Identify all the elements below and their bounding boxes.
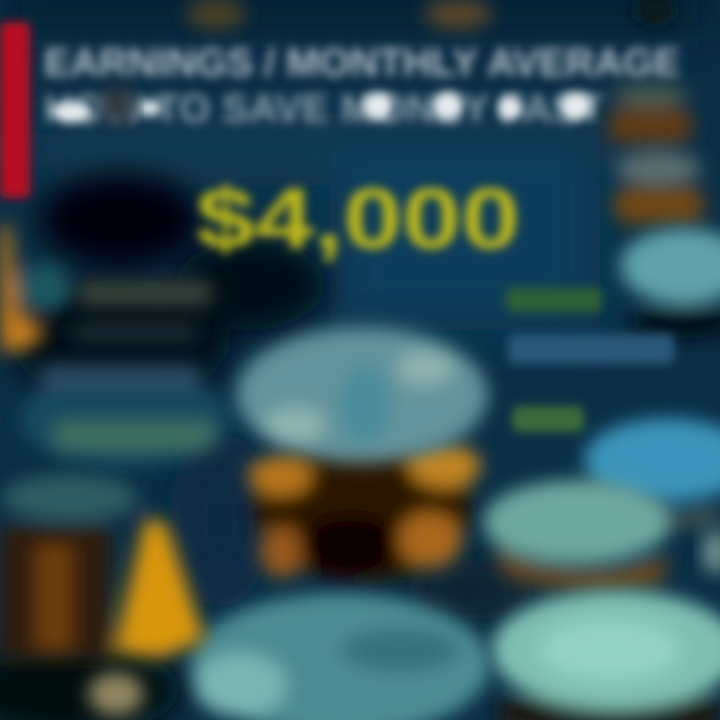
- figure at title: [102, 84, 134, 124]
- headline amount: $4,000: [196, 171, 520, 267]
- right coin stack top: [608, 84, 704, 224]
- bottom right coin: [491, 590, 720, 720]
- title highlights: [52, 92, 592, 122]
- top edge coins: [186, 0, 675, 30]
- title: [44, 41, 680, 131]
- right teal coin: [620, 228, 720, 338]
- right text lines: [506, 288, 674, 432]
- bottom left small coin: [88, 672, 144, 716]
- right blue coin: [584, 418, 720, 527]
- dark shadow blob: [0, 174, 325, 720]
- edge coin: [702, 530, 720, 574]
- center coin face: [236, 327, 488, 463]
- red bar: [0, 22, 30, 198]
- title: HOW TO SAVE MONEY FAST: [44, 87, 604, 131]
- bottom center coin: [190, 593, 490, 720]
- center coin base: [248, 429, 481, 581]
- title: EARNINGS / MONTHLY AVERAGE: [44, 41, 680, 85]
- left text stack: [20, 280, 230, 468]
- right mid teal coin: [483, 480, 671, 591]
- left bell: [0, 225, 72, 352]
- center coin: [236, 327, 488, 581]
- bottom left bell: [0, 474, 205, 660]
